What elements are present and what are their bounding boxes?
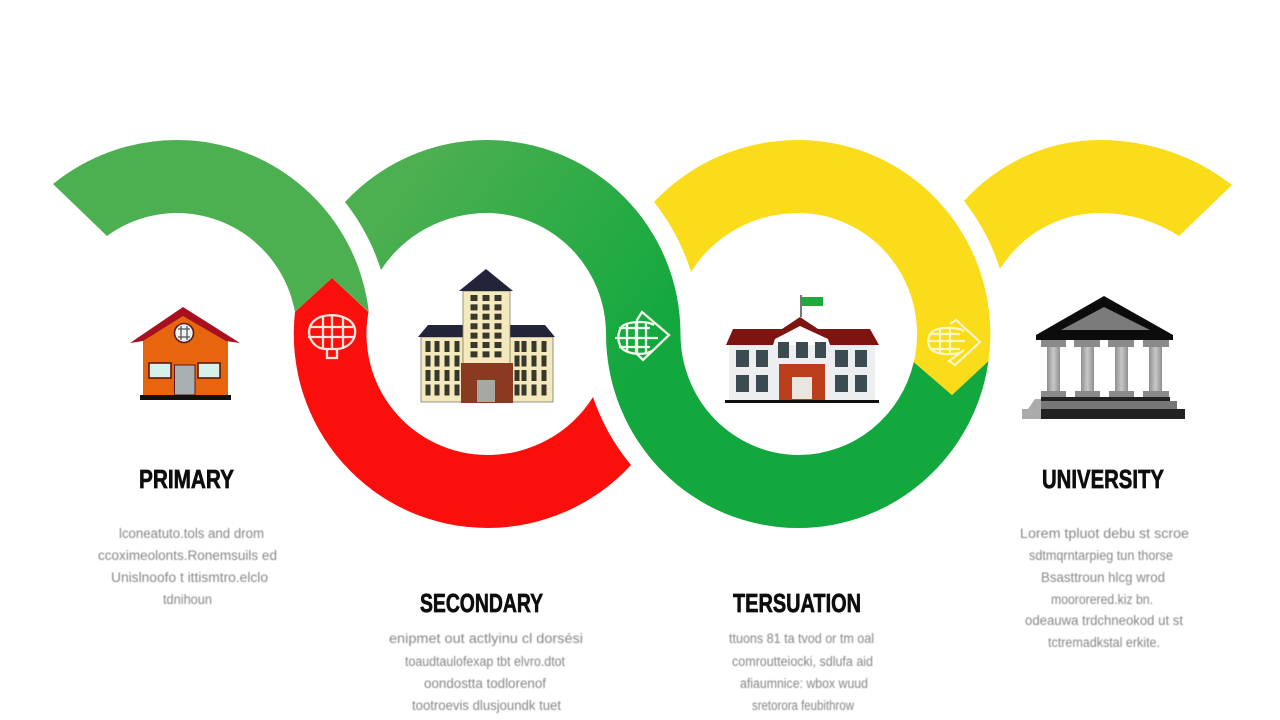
ribbon: primary green arc [53, 140, 369, 312]
text block: secondary: tootroevis dlusjoundk tuet [412, 698, 561, 713]
text block: primary [98, 526, 277, 607]
panel: secondary [389, 588, 583, 713]
text block: tertiary: ttuons 81 ta tvod or tm oal [729, 631, 874, 646]
text block: secondary: enipmet out actlyinu cl dorsési [389, 631, 583, 646]
infographic: wave ribbon [53, 140, 1232, 528]
icon: secondary school building [418, 269, 555, 403]
icon: university columns [1022, 296, 1185, 419]
heading: tertiary: TERSUATION [733, 588, 861, 618]
text block: primary: tdnihoun [163, 592, 212, 607]
ribbon: university yellow arc [964, 140, 1232, 269]
text block: secondary: toaudtaulofexap tbt elvro.dtot [405, 654, 565, 669]
text block: tertiary: comroutteiocki, sdlufa aid [732, 654, 873, 669]
text block: secondary: oondostta todlorenof [424, 676, 546, 691]
text block: secondary [389, 631, 583, 713]
text block: university: sdtmqrntarpieg tun thorse [1029, 548, 1173, 563]
heading: secondary: SECONDARY [420, 588, 543, 618]
icon: globe and arrow on yellow [928, 320, 980, 365]
heading: primary: PRIMARY [139, 464, 234, 494]
text block: university: moororered.kiz bn. [1051, 592, 1153, 607]
icon: tertiary college building [725, 295, 879, 403]
text block: university: odeauwa trdchneokod ut st [1025, 613, 1183, 628]
text block: tertiary [729, 631, 874, 713]
text block: university [1020, 526, 1189, 650]
icon: house [130, 307, 240, 400]
text block: primary: lconeatuto.tols and drom [119, 526, 264, 541]
icon: globe and arrow on green [615, 312, 669, 360]
text block: primary: Unislnoofo t ittismtro.elclo [111, 570, 268, 585]
text block: university: Lorem tpluot debu st scroe [1020, 526, 1189, 541]
ribbon: secondary green arc [345, 140, 988, 528]
ribbon: red arc [294, 278, 631, 528]
panel: primary [98, 464, 277, 607]
panel: tertiary [729, 588, 874, 713]
text block: university: tctremadkstal erkite. [1048, 635, 1160, 650]
icon: globe on red [308, 314, 355, 358]
text block: tertiary: afiaumnice: wbox wuud [740, 676, 868, 691]
text block: tertiary: sretorora feubithrow [752, 698, 854, 713]
ribbon: yellow arc [654, 140, 990, 395]
panel: university [1020, 464, 1189, 650]
text block: primary: ccoximeolonts.Ronemsuils ed [98, 548, 277, 563]
text block: university: Bsasttroun hlcg wrod [1041, 570, 1165, 585]
heading: university: UNIVERSITY [1042, 464, 1164, 494]
